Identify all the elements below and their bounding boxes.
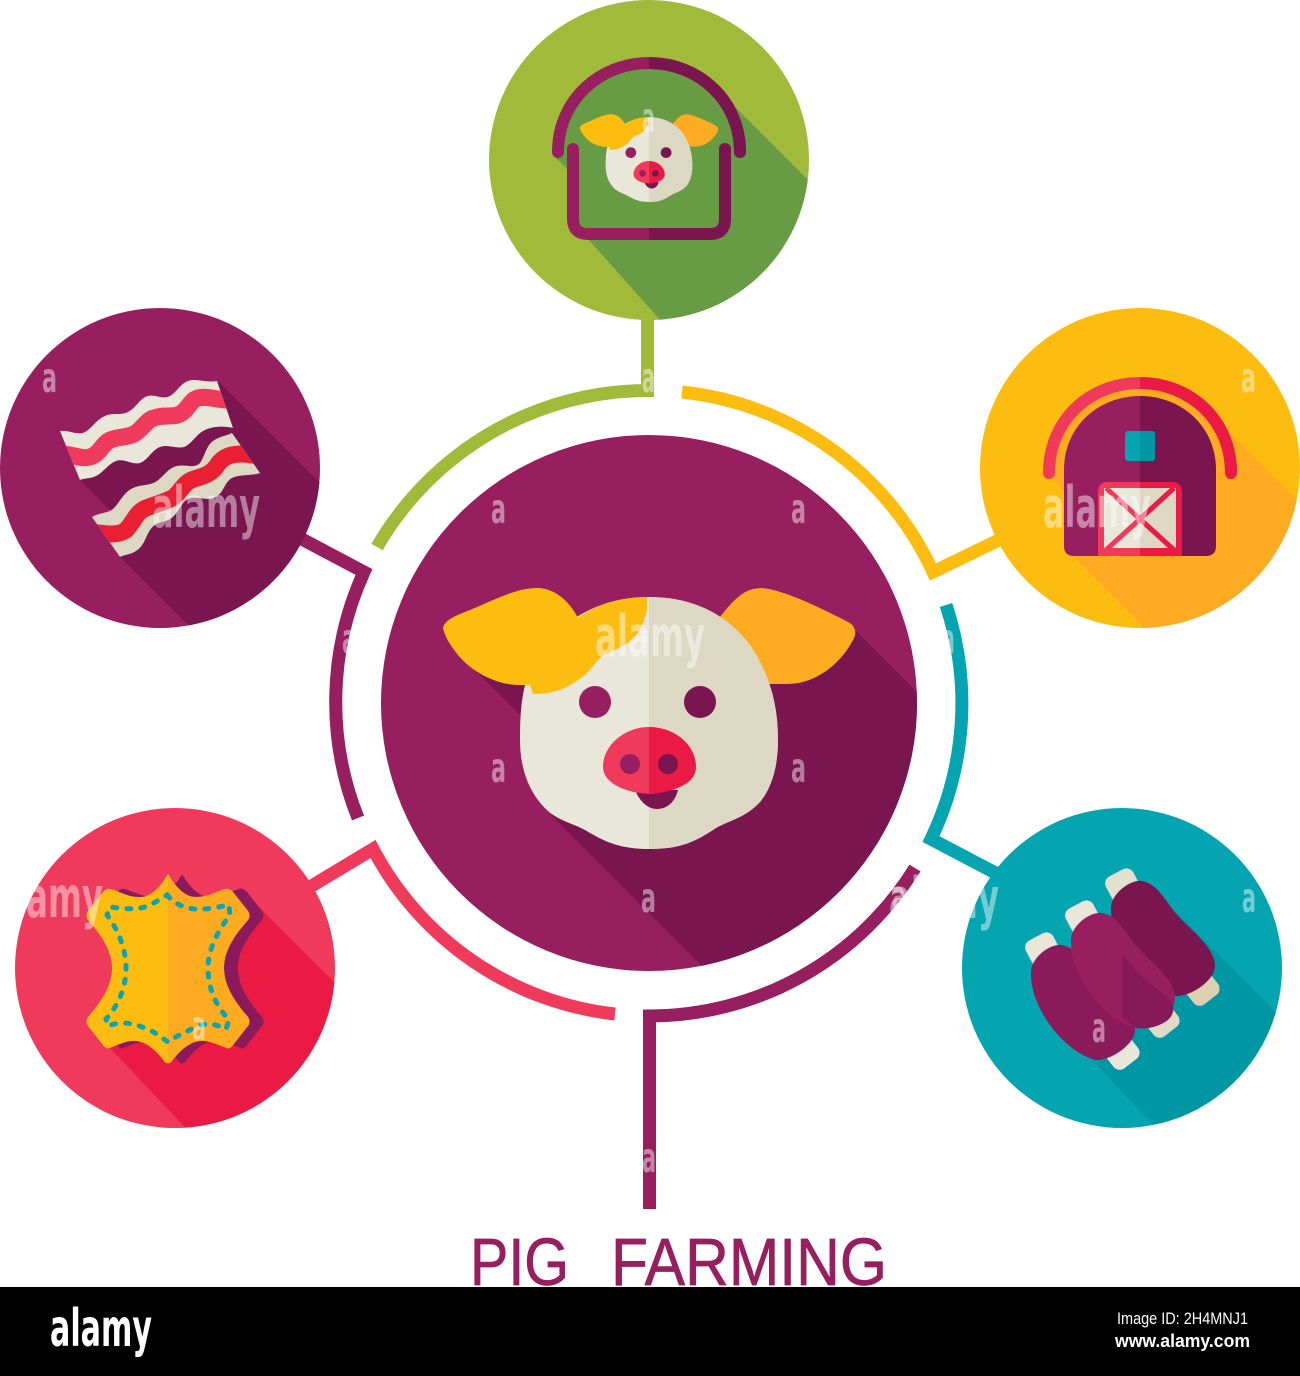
icon: pig house frame [558, 63, 740, 234]
icon: bacon strip upper [60, 380, 233, 480]
watermark text: a [1242, 874, 1256, 922]
ring segment: pink connector [300, 849, 615, 1014]
ring segment: teal connector [931, 605, 1005, 878]
title: PIG [470, 1225, 569, 1300]
panel: central pig circle [381, 435, 917, 971]
icon: pig face [443, 588, 855, 855]
watermark text [0, 94, 1256, 1182]
icon: rib meat centre [1071, 913, 1175, 1029]
ring segment: yellow connector [682, 392, 1003, 572]
watermark text: a [642, 354, 655, 402]
panel: pig house circle [489, 0, 820, 330]
website: www.alamy.com [1114, 1331, 1250, 1351]
icon: bacon strip lower [92, 433, 260, 557]
watermark text: a [641, 874, 656, 922]
panel: bacon circle [0, 308, 330, 640]
watermark text: a [1241, 354, 1256, 402]
footer bar [0, 1287, 1300, 1376]
icon: rib bones [1022, 866, 1223, 1073]
panel: barn circle [980, 308, 1300, 640]
panel: leather circle [15, 808, 345, 1140]
panel: ribs circle [962, 808, 1290, 1140]
icon: barn door [1098, 482, 1182, 556]
ring segment: purple bottom connector [650, 868, 915, 1209]
watermark text: a [791, 744, 806, 792]
footer logo: alamy [50, 1299, 152, 1359]
watermark text: alamy [889, 866, 999, 932]
ring segment: purple left connector [298, 537, 364, 818]
watermark text: a [342, 615, 356, 663]
icon: barn roof arch [1049, 383, 1231, 473]
ring segment: green connector [377, 316, 648, 547]
title: FARMING [611, 1225, 887, 1300]
watermark text: a [642, 94, 655, 142]
icon: rib meat left [1031, 945, 1135, 1060]
watermark text: a [192, 1002, 206, 1050]
watermark text: a [642, 1134, 656, 1182]
icon: small pig face [580, 114, 718, 204]
icon: leather stitching [106, 895, 230, 1042]
watermark text: a [1092, 1004, 1106, 1052]
icon: leather hide shadow [100, 874, 264, 1063]
image id: Image ID: 2H4MNJ1 [1117, 1309, 1248, 1328]
icon: leather hide [86, 874, 250, 1063]
icon: barn body [1064, 396, 1216, 556]
watermark text: alamy [152, 475, 260, 541]
watermark text: a [941, 615, 955, 663]
watermark text: a [491, 744, 506, 792]
watermark text: a [892, 872, 906, 920]
watermark text: alamy [595, 604, 705, 670]
watermark text: a [491, 485, 506, 533]
icon: rib meat right [1111, 881, 1215, 996]
title [470, 1225, 887, 1300]
watermark text: a [791, 485, 806, 533]
icon: barn window [1125, 431, 1155, 461]
watermark text: alamy [1043, 475, 1151, 541]
watermark text: a [42, 354, 57, 402]
